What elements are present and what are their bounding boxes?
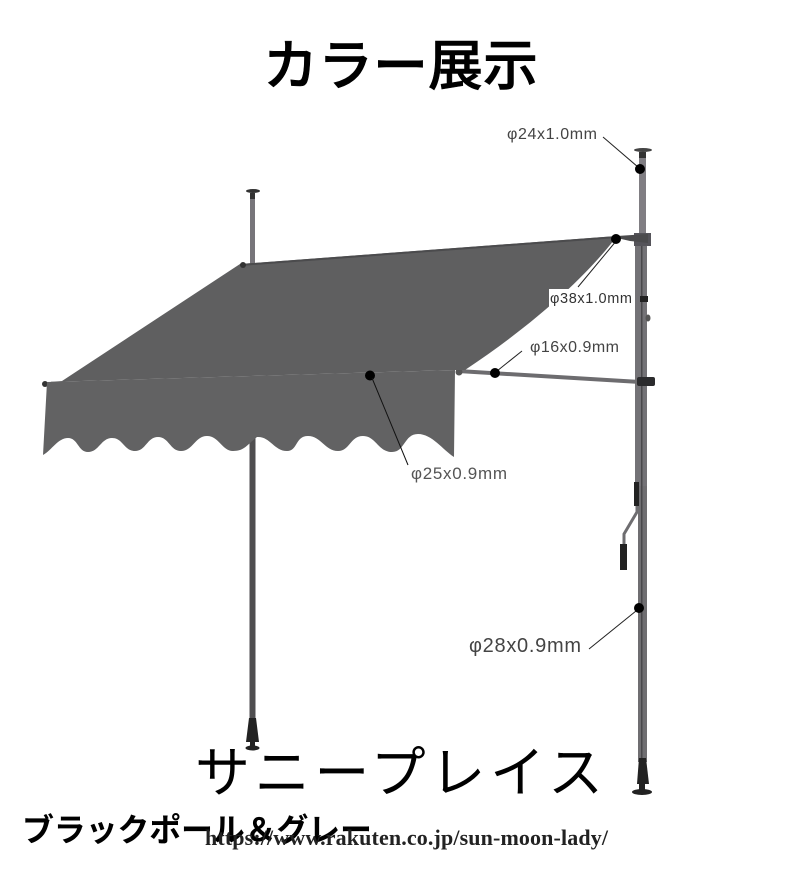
title: カラー展示 xyxy=(263,35,538,97)
dimension callout: 28x0.9mm: φ28x0.9mm xyxy=(469,635,581,657)
colour variant label: ブラックポール＆グレー xyxy=(22,812,372,848)
roller bar xyxy=(42,234,648,387)
dimension callout: 25x0.9mm: φ25x0.9mm xyxy=(411,464,507,483)
rear left pole xyxy=(246,189,260,750)
dimension callout: 16x0.9mm: φ16x0.9mm xyxy=(530,339,619,356)
scalloped valance xyxy=(43,370,455,457)
dimension callout: 28x0.9mm xyxy=(469,603,644,657)
dimension callout: 24x1.0mm xyxy=(507,126,645,174)
dimension callout: 16x0.9mm xyxy=(490,339,619,378)
dimension callout: 38x1.0mm: φ38x1.0mm xyxy=(550,291,632,307)
awning canopy xyxy=(47,236,617,382)
crossbar arm xyxy=(456,368,655,386)
right pole with crank xyxy=(620,148,652,795)
dimension callout: 38x1.0mm xyxy=(549,234,633,307)
brand name: サニープレイス xyxy=(195,742,603,804)
dimension callout: 25x0.9mm xyxy=(365,370,507,483)
shop url: https://www.rakuten.co.jp/sun-moon-lady/ xyxy=(205,825,609,850)
dimension callout: 24x1.0mm: φ24x1.0mm xyxy=(507,126,597,143)
